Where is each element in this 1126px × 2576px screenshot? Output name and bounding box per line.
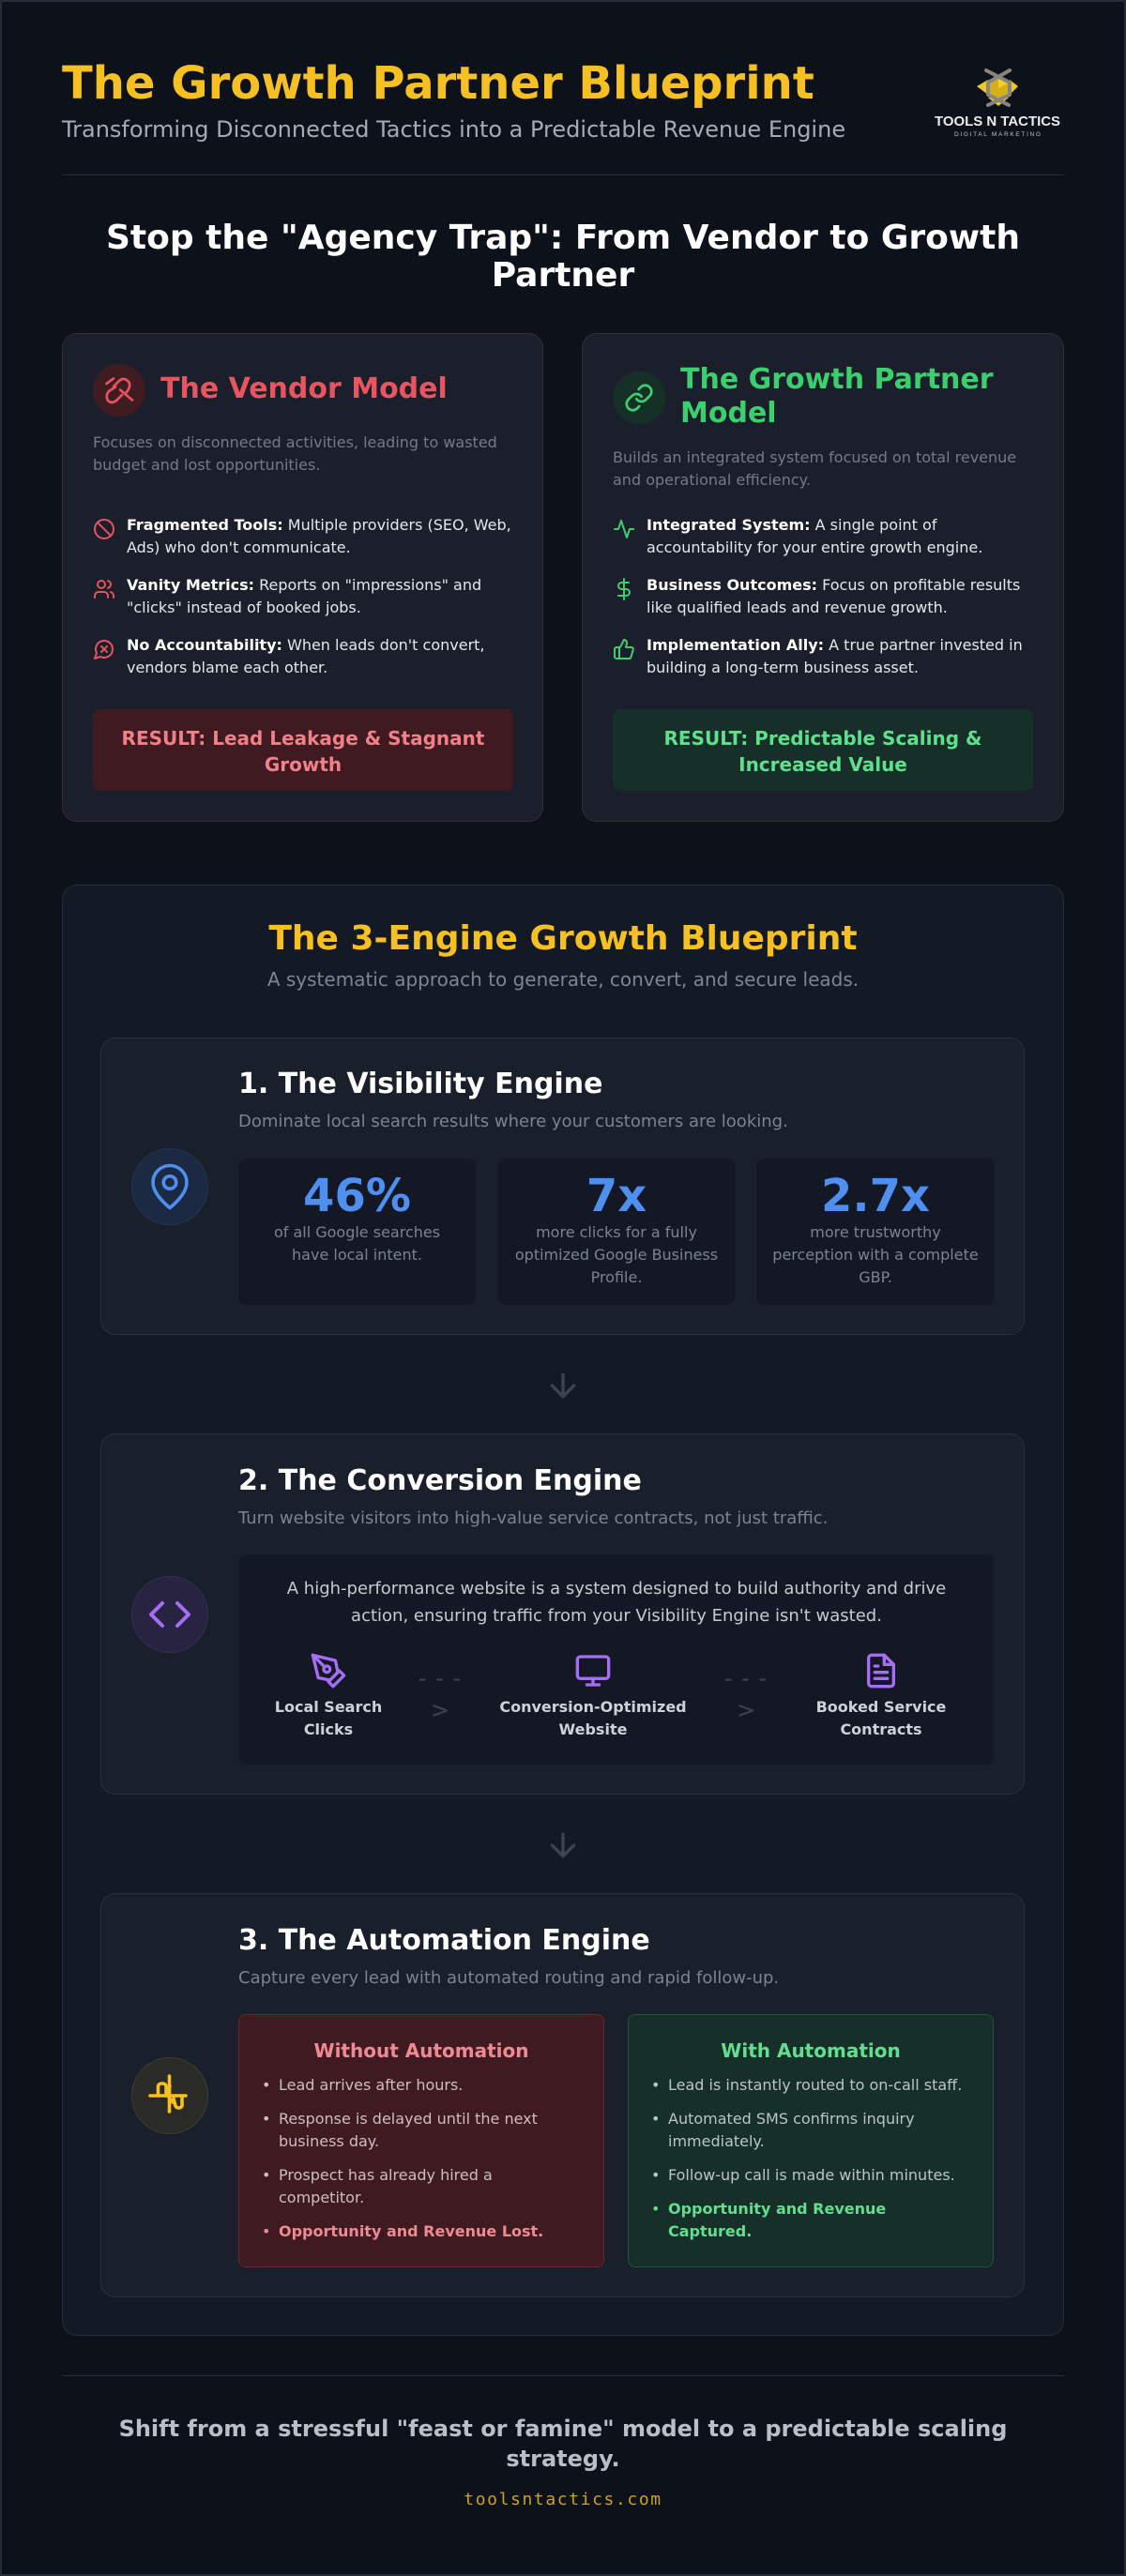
with list: Automated SMS confirms inquiry [668, 2110, 915, 2128]
engine 1: visibility [100, 1038, 1025, 1335]
connector 2 chevron: > [737, 1697, 755, 1723]
footer link: toolsntactics.com [464, 2490, 662, 2509]
conversion flow box [239, 1554, 994, 1765]
stat: 2.7x: more trustworthy [810, 1223, 941, 1241]
footer statement: strategy. [506, 2446, 620, 2472]
stat: 46%: of all Google searches [274, 1223, 440, 1241]
without list: Lead arrives after hours. [279, 2076, 463, 2094]
partner title [680, 363, 994, 430]
with list: immediately. [668, 2132, 765, 2150]
panel: growth partner model [582, 333, 1064, 822]
icon: automation [131, 2057, 208, 2134]
with list: • [651, 2076, 660, 2094]
with list: Lead is instantly routed to on-call staff. [668, 2076, 962, 2094]
with list: Follow-up call is made within minutes. [668, 2166, 955, 2184]
vendor result [93, 709, 513, 791]
engine 1 heading: 1. The Visibility Engine [238, 1068, 602, 1100]
item: business outcomes: like qualified leads and revenue growth. [647, 599, 948, 616]
item: no accountability [94, 636, 485, 676]
stat: 46%: have local intent. [292, 1246, 422, 1264]
engine 2 subheading: Turn website visitors into high-value service contracts, not just traffic. [238, 1508, 828, 1528]
arrow: engine 2 to 3 [550, 1833, 576, 1857]
engine 1 subheading: Dominate local search results where your customers are looking. [238, 1112, 788, 1131]
item: business outcomes: Business Outcomes: Focus on profitable results [647, 576, 1020, 594]
engine 2: conversion [100, 1433, 1025, 1795]
icon: link [613, 371, 665, 424]
arrow: engine 1 to 2 [550, 1373, 576, 1398]
engine 3: automation [100, 1893, 1025, 2297]
stat: 7x: optimized Google Business [515, 1246, 718, 1264]
step: booked service contracts [816, 1698, 946, 1738]
vendor description: Focuses on disconnected activities, leading to wasted [93, 433, 497, 451]
vendor description [93, 433, 497, 474]
step: conversion-optimized website [499, 1698, 687, 1738]
partner description [613, 448, 1016, 489]
without list: Opportunity and Revenue Lost. [279, 2222, 543, 2240]
stat: 2.7x: perception with a complete [772, 1246, 979, 1264]
item: fragmented tools: Ads) who don't communicate. [127, 538, 351, 556]
step: booked service contracts: Booked Service [816, 1698, 946, 1716]
stat: 7x: more clicks for a fully [536, 1223, 697, 1241]
item: implementation ally [614, 636, 1023, 676]
flow description: A high-performance website is a system designed to build authority and drive [287, 1579, 946, 1599]
item: no accountability: No Accountability: When leads don't convert, [127, 636, 485, 654]
vendor result: Growth [265, 753, 342, 776]
item: integrated system [614, 516, 982, 556]
icon: file text [867, 1653, 895, 1689]
panel: 3-engine blueprint [62, 885, 1064, 2336]
vendor title: The Vendor Model [160, 372, 448, 405]
logo: Tools N Tactics: DIGITAL MARKETING [954, 131, 1041, 138]
item: vanity metrics: "clicks" instead of booked jobs. [127, 599, 361, 616]
without list: • [262, 2076, 270, 2094]
stat: 46%: 46% [303, 1170, 411, 1222]
panel: without automation [238, 2014, 604, 2267]
without list: • [262, 2166, 270, 2184]
step: local search clicks: Local Search [275, 1698, 382, 1716]
header subtitle: Transforming Disconnected Tactics into a Predictable Revenue Engine [62, 116, 845, 143]
connector 1 chevron: > [431, 1697, 449, 1723]
vendor result: RESULT: Lead Leakage & Stagnant [122, 727, 484, 750]
partner title: Model [680, 397, 777, 430]
item: integrated system: Integrated System: A single point of [647, 516, 936, 534]
item: business outcomes [617, 576, 1020, 616]
section heading: Partner [492, 256, 634, 295]
step: conversion-optimized website: Website [559, 1720, 627, 1738]
engine 3 heading: 3. The Automation Engine [238, 1924, 650, 1957]
without heading: Without Automation [314, 2039, 528, 2062]
flow description [287, 1579, 946, 1626]
logo: Tools N Tactics: TOOLS N TACTICS [935, 114, 1060, 129]
step: local search clicks: Clicks [304, 1720, 353, 1738]
step: booked service contracts: Contracts [840, 1720, 922, 1738]
blueprint subtitle: A systematic approach to generate, convert, and secure leads. [267, 968, 859, 991]
step: conversion-optimized website: Conversion-Optimized [499, 1698, 687, 1716]
item: implementation ally: Implementation Ally: A true partner invested in [647, 636, 1023, 654]
with list: • [651, 2200, 660, 2218]
partner title: The Growth Partner [680, 363, 994, 396]
without list: business day. [279, 2132, 379, 2150]
footer statement: Shift from a stressful "feast or famine" model to a predictable scaling [119, 2416, 1007, 2442]
step: local search clicks [275, 1698, 382, 1738]
panel: vendor model [62, 333, 543, 822]
panel: with automation [628, 2014, 994, 2267]
connector 2 dashes: - - - [724, 1665, 768, 1691]
with heading: With Automation [721, 2039, 901, 2062]
item: integrated system: accountability for your entire growth engine. [647, 538, 982, 556]
partner result: Increased Value [738, 753, 907, 776]
stat: 7x: Profile. [591, 1268, 642, 1286]
icon: map pin [131, 1148, 208, 1225]
vendor description: budget and lost opportunities. [93, 456, 320, 474]
without list: • [262, 2110, 270, 2128]
section heading [106, 219, 1020, 295]
with list [651, 2076, 962, 2240]
stat: 2.7x: 2.7x [821, 1170, 930, 1222]
item: vanity metrics: Vanity Metrics: Reports on "impressions" and [127, 576, 481, 594]
header title: The Growth Partner Blueprint [62, 57, 814, 110]
with list: Captured. [668, 2222, 752, 2240]
item: fragmented tools [94, 516, 511, 556]
engine 2 heading: 2. The Conversion Engine [238, 1464, 642, 1497]
blueprint title: The 3-Engine Growth Blueprint [268, 919, 858, 958]
without list: competitor. [279, 2189, 364, 2206]
stat: 2.7x [756, 1159, 995, 1305]
stat: 46% [238, 1159, 476, 1305]
partner result: RESULT: Predictable Scaling & [664, 727, 981, 750]
with list: Opportunity and Revenue [668, 2200, 886, 2218]
icon: monitor [576, 1655, 610, 1687]
engine 3 subheading: Capture every lead with automated routing and rapid follow-up. [238, 1968, 779, 1988]
footer statement [119, 2416, 1007, 2472]
icon: pen tool [312, 1653, 345, 1689]
without list: Response is delayed until the next [279, 2110, 538, 2128]
stat: 7x [498, 1159, 735, 1305]
with list: • [651, 2110, 660, 2128]
section heading: Stop the "Agency Trap": From Vendor to Growth [106, 219, 1020, 257]
icon: code [131, 1576, 208, 1653]
stat: 2.7x: GBP. [859, 1268, 892, 1286]
partner description: and operational efficiency. [613, 471, 811, 489]
icon: broken link [93, 364, 145, 417]
without list [262, 2076, 543, 2240]
with list: • [651, 2166, 660, 2184]
connector 1 dashes: - - - [418, 1665, 462, 1691]
without list: Prospect has already hired a [279, 2166, 493, 2184]
item: vanity metrics [94, 576, 481, 616]
partner result [613, 709, 1033, 791]
item: fragmented tools: Fragmented Tools: Multiple providers (SEO, Web, [127, 516, 511, 534]
without list: • [262, 2222, 270, 2240]
partner description: Builds an integrated system focused on total revenue [613, 448, 1016, 466]
logo: Tools N Tactics [935, 68, 1060, 138]
stat: 7x: 7x [586, 1170, 647, 1222]
item: no accountability: vendors blame each other. [127, 659, 327, 676]
item: implementation ally: building a long-term business asset. [647, 659, 919, 676]
flow description: action, ensuring traffic from your Visibility Engine isn't wasted. [351, 1606, 882, 1626]
